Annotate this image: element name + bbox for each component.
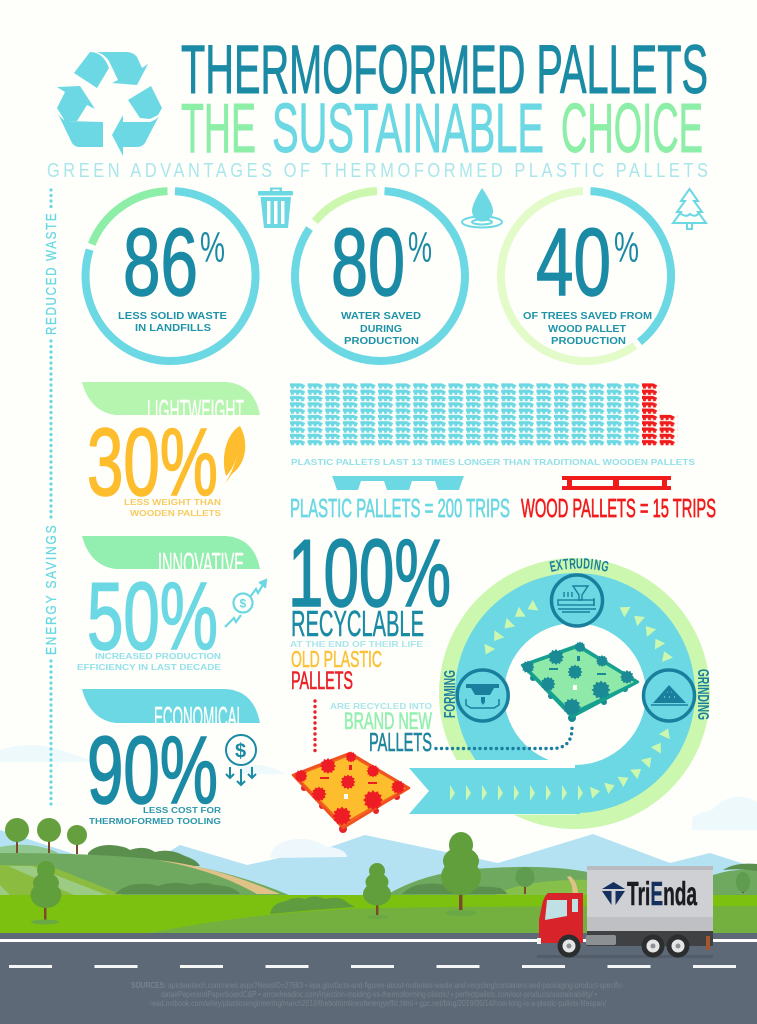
truck (537, 866, 713, 958)
scenery: grass (0, 895, 757, 933)
panel: 40% trees saved: WOOD PALLET (548, 323, 627, 335)
text block: recycled into brand new pallets (330, 701, 432, 757)
icon: wood pallet side view (562, 476, 671, 490)
label: extruding: U (576, 555, 583, 572)
loop direction arrows (450, 600, 674, 801)
panel: 40% trees saved: 40 (536, 209, 611, 316)
label: extruding: N (593, 556, 602, 574)
title: THE (181, 89, 256, 167)
label: extruding (548, 555, 610, 576)
caption: plastic pallets last 13 times longer: PLASTIC PALLETS LAST 13 TIMES LONGER THAN TRADITIONAL WOODEN PALLETS (291, 457, 695, 467)
scenery: rolling hills (0, 845, 757, 900)
label: extruding: D (583, 555, 590, 572)
scenery: mountains (0, 830, 757, 900)
label: extruding: T (562, 556, 570, 573)
panel: innovative (77, 536, 260, 672)
icon: growth dollar: $ (240, 596, 246, 610)
text block: 100% recyclable: 100% (288, 520, 451, 627)
panel: 86% less solid waste: 86 (123, 209, 198, 316)
icon: growth dollar (225, 580, 266, 627)
scenery: trees (5, 818, 750, 924)
panel: economical: ECONOMICAL (154, 702, 244, 734)
icon: forming mold (457, 670, 508, 721)
panel: 80% water saved: PRODUCTION (344, 335, 419, 347)
subtitle: GREEN ADVANTAGES OF THERMOFORMED PLASTIC PALLETS (47, 158, 708, 181)
panel: 86% less solid waste: % (200, 224, 225, 272)
panel: lightweight: WOODEN PALLETS (130, 509, 222, 518)
icon: new green pallet (522, 642, 638, 722)
panel: 80% water saved: WATER SAVED (341, 310, 421, 322)
panel: 80% water saved: DURING (360, 323, 402, 335)
text block: 100% recyclable: RECYCLABLE (291, 603, 424, 644)
panel: 40% trees saved (501, 191, 671, 361)
icon: grinding pile (644, 670, 694, 721)
panel: 86% less solid waste (86, 191, 256, 361)
panel: economical: THERMOFORMED TOOLING (89, 817, 221, 826)
panel: economical: LESS COST FOR (143, 806, 221, 815)
sources: data#PaperandPaperboardC&P • arrowheadinc.com/injection-molding-vs-thermoforming-plastic/ • perfectpallets.com/our-products/sustainability/ • (161, 990, 597, 999)
panel: 80% water saved: 80 (331, 209, 405, 316)
text block: 100% recyclable: PALLETS (291, 667, 353, 695)
panel: innovative: INCREASED PRODUCTION (95, 652, 221, 661)
stat: plastic pallets trips: PLASTIC PALLETS = 200 TRIPS (290, 493, 510, 523)
icon: recycle symbol (57, 52, 162, 156)
panel: innovative: EFFICIENCY IN LAST DECADE (77, 663, 222, 672)
text block: 100% recyclable (288, 520, 451, 695)
title: SUSTAINABLE (272, 89, 544, 167)
road (0, 933, 757, 1024)
panel: lightweight: LESS WEIGHT THAN (124, 498, 221, 507)
label: extruding: E (548, 558, 558, 576)
text block: recycled into brand new pallets: ARE RECYCLED INTO (330, 701, 432, 711)
side label: reduced waste: REDUCED WASTE (43, 213, 59, 335)
icon: dollar with down arrows (226, 735, 256, 785)
panel: lightweight: LIGHTWEIGHT (147, 395, 244, 427)
text block: recycled into brand new pallets: BRAND NEW (344, 708, 432, 735)
TriEnda logo (602, 875, 697, 912)
panel: 40% trees saved: PRODUCTION (551, 335, 626, 347)
icon: old orange pallet (293, 752, 409, 833)
sources (131, 981, 624, 1008)
recycling loop (400, 555, 711, 829)
icon: pine tree (673, 189, 706, 229)
text block: recycled into brand new pallets: PALLETS (369, 727, 432, 757)
sources: SOURCES: aptcleantech.com/news.aspx?NewsID=27683 • epa.gov/facts-and-figures-about-materials-waste-and-recycling/containers-and-packaging-product-specific- (131, 981, 624, 990)
icon: extruding machine (552, 575, 602, 626)
icon: plastic pallet side view (332, 476, 464, 490)
label: extruding: I (590, 556, 594, 573)
label: forming: FORMING (442, 670, 459, 718)
label: extruding: R (569, 555, 576, 573)
dotted connector: old pallets (313, 701, 317, 755)
panel: innovative: INNOVATIVE (158, 548, 244, 580)
text block: 100% recyclable: AT THE END OF THEIR LIFE (290, 639, 423, 649)
icon: dollar with down arrows: $ (235, 740, 246, 762)
icon: water drop (462, 188, 502, 228)
scenery: pale clouds (0, 745, 757, 830)
panel: 40% trees saved: OF TREES SAVED FROM (523, 310, 652, 322)
icon: feather (224, 426, 245, 484)
TriEnda logo: TriEnda (627, 875, 697, 912)
panel: 80% water saved: % (408, 224, 432, 272)
sources: read.nxtbook.com/wiley/plasticsengineering/march2018/thebottomlineofenergyeffic.html • gpc.net/blog/2019/05/14/how-long-is-a-plastic-pallets-lifespan/ (150, 999, 607, 1008)
label: extruding: X (555, 556, 564, 574)
chart: pallet pictogram grid (290, 383, 677, 446)
label: grinding: GRINDING (694, 669, 711, 720)
panel: 86% less solid waste: LESS SOLID WASTE (118, 310, 227, 322)
side label: energy savings: ENERGY SAVINGS (43, 525, 59, 655)
panel: 80% water saved (295, 191, 465, 361)
icon: trash can (258, 188, 293, 228)
text block: 100% recyclable: OLD PLASTIC (291, 646, 382, 672)
label: extruding: G (600, 558, 610, 576)
dotted connector: new pallets (436, 728, 572, 748)
panel: economical: 90% (87, 717, 218, 824)
panel: 86% less solid waste: IN LANDFILLS (135, 322, 211, 334)
title (181, 31, 708, 167)
panel: 40% trees saved: % (614, 224, 639, 272)
panel: lightweight: 30% (87, 409, 218, 516)
panel: innovative: 50% (87, 563, 218, 670)
